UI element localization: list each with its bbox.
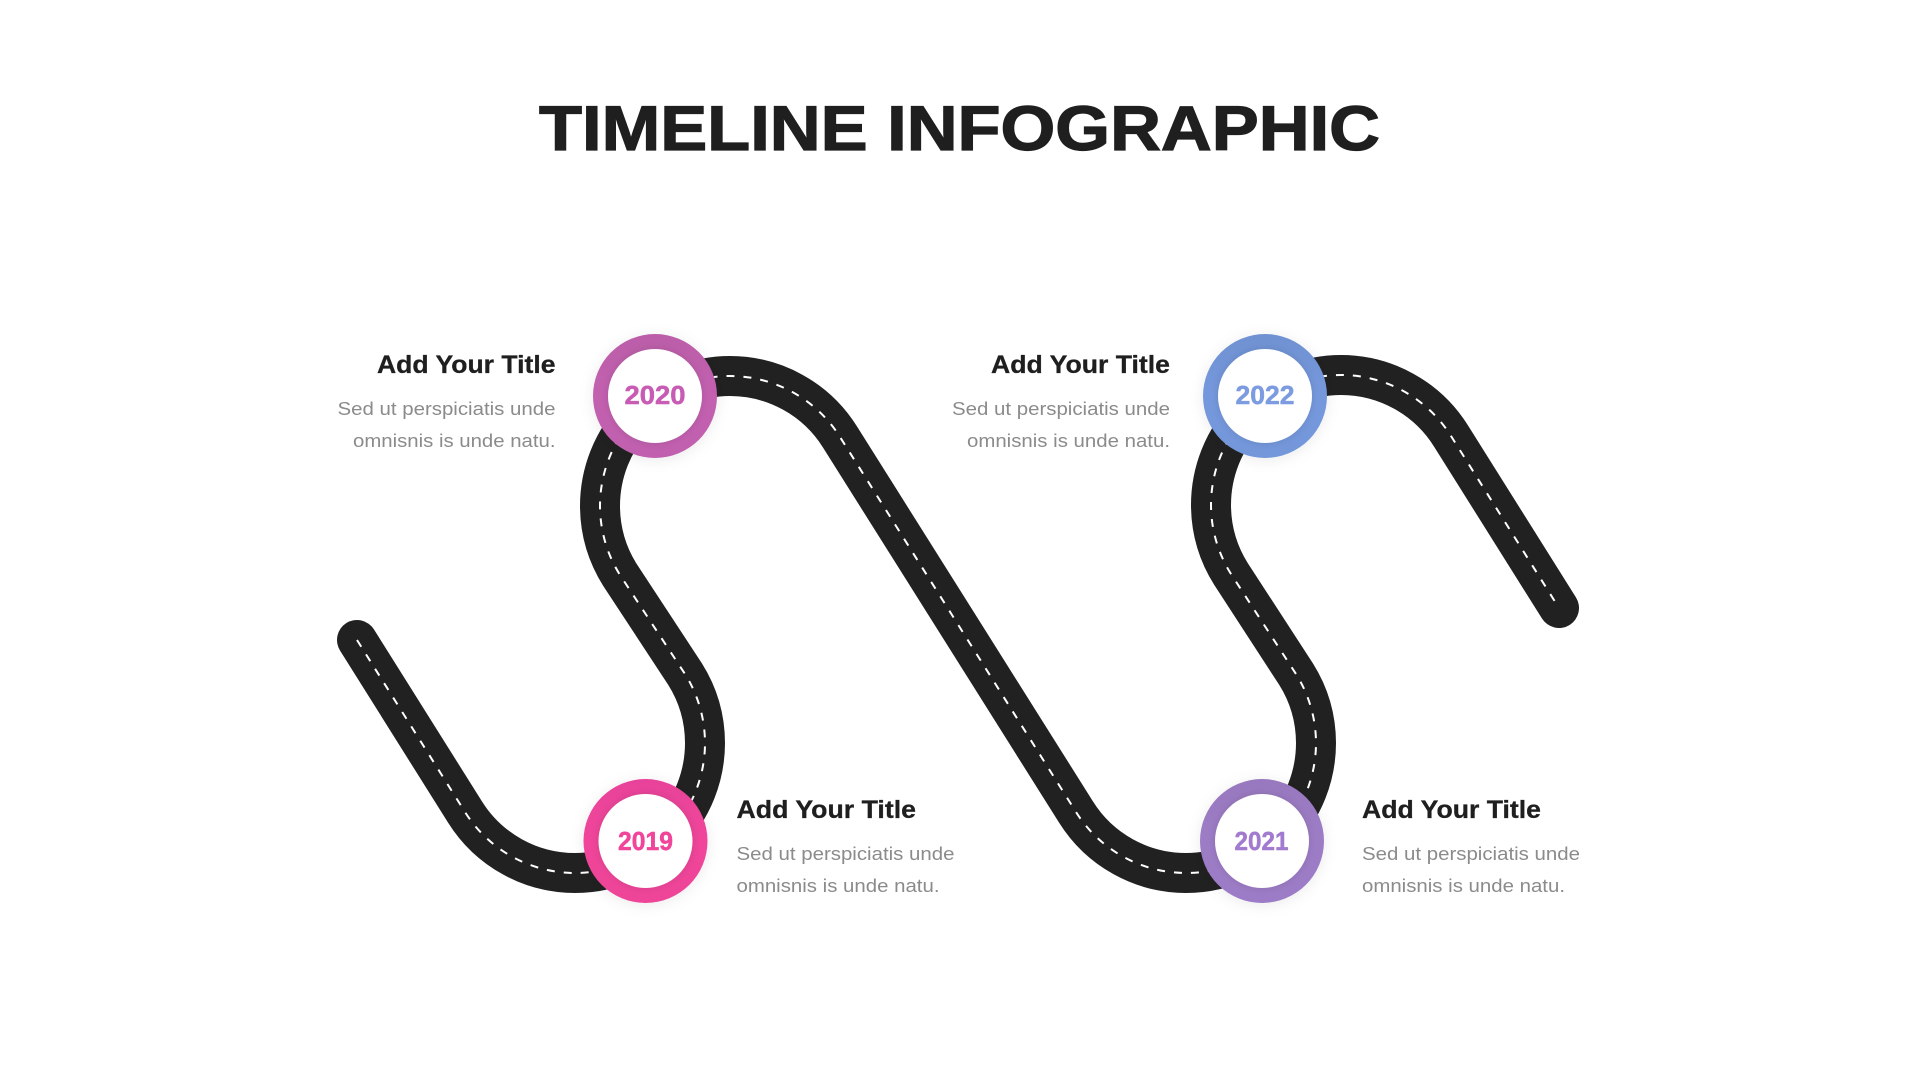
text block 2020: Add Your Title [377,351,556,379]
text block 2021: Sed ut perspiciatis unde [1362,843,1580,864]
text block 2022: omnisnis is unde natu. [967,430,1170,451]
text block 2021: Add Your Title [1362,796,1541,824]
text block 2021: omnisnis is unde natu. [1362,875,1565,896]
milestone 2020 marker [593,334,717,458]
text block 2019: Add Your Title [736,796,916,824]
text block 2022: Sed ut perspiciatis unde [952,398,1170,419]
title: TIMELINE INFOGRAPHIC [539,94,1380,164]
text block 2022: Add Your Title [991,351,1170,379]
milestone 2020 marker: 2020 [624,382,686,410]
winding road timeline [357,375,1559,873]
text block 2019: Sed ut perspiciatis unde [736,843,954,864]
milestone 2022 marker: 2022 [1236,382,1294,410]
text block 2019: omnisnis is unde natu. [736,875,940,896]
milestone 2021 marker: 2021 [1234,828,1288,856]
road centre dashes [357,375,1559,873]
milestone 2022 marker [1203,334,1327,458]
text block 2021 [1362,796,1580,896]
text block 2020 [338,351,556,451]
text block 2020: omnisnis is unde natu. [353,430,556,451]
text block 2020: Sed ut perspiciatis unde [338,398,556,419]
milestone 2019 marker [584,779,708,903]
text block 2022 [952,351,1170,451]
milestone 2021 marker [1200,779,1324,903]
road surface [357,375,1559,873]
text block 2019 [736,796,954,896]
milestone 2019 marker: 2019 [618,828,673,856]
